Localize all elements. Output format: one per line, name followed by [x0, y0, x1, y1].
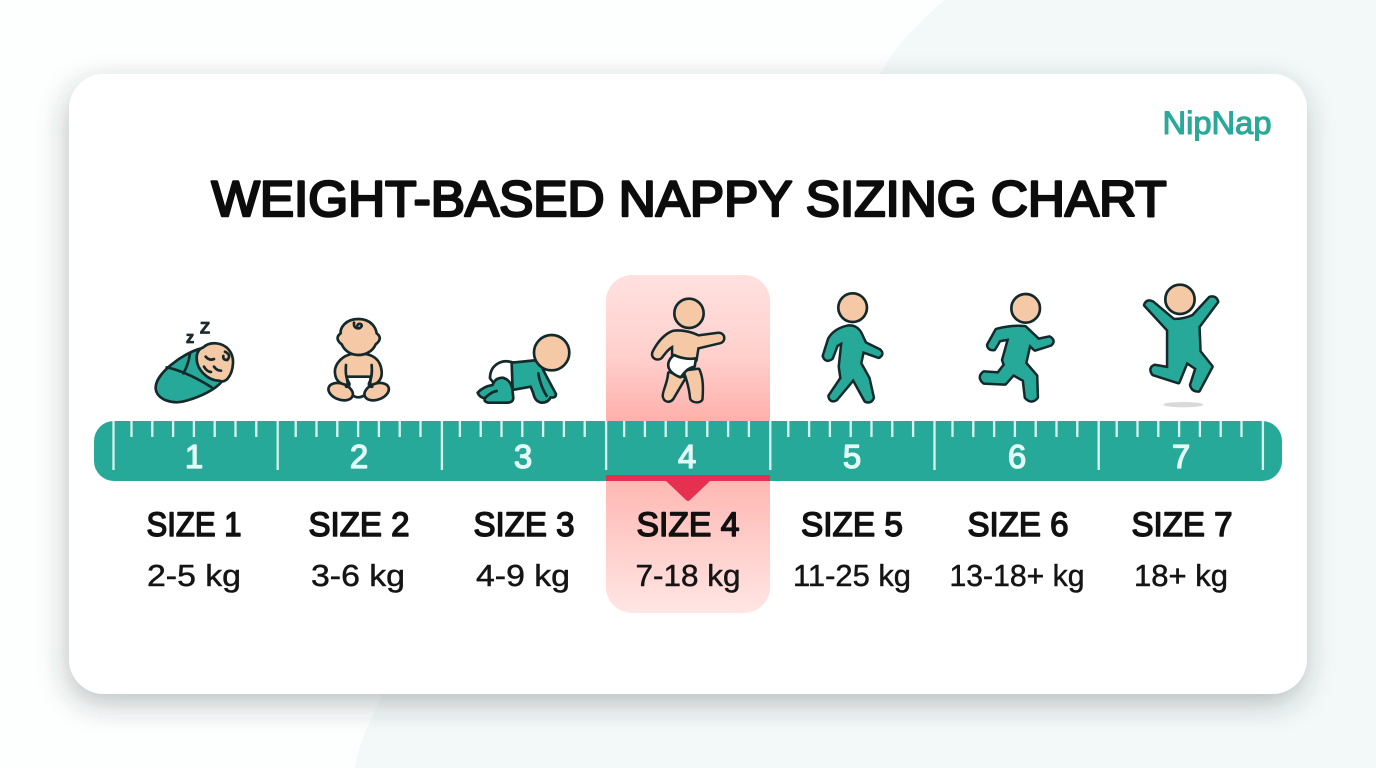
highlight panel: size 4 — [606, 275, 770, 613]
label: size 3: SIZE 3 — [474, 506, 574, 544]
panel: main card — [69, 74, 1307, 694]
label: size 5 — [793, 506, 911, 593]
label: size 7: SIZE 7 — [1132, 506, 1232, 544]
ruler numbers: 2 — [350, 438, 368, 475]
label: size 2 — [308, 506, 410, 593]
label: size 1: SIZE 1 — [146, 506, 242, 544]
label: size 7: 18+ kg — [1134, 558, 1228, 593]
icon: crawling baby — [478, 335, 569, 403]
sleep letters: Z — [200, 319, 210, 338]
label: size 6: SIZE 6 — [968, 506, 1068, 544]
size 4 marker — [606, 475, 770, 501]
label: size 5: 11-25 kg — [793, 558, 911, 593]
icon: jumping child — [1145, 285, 1217, 407]
label: size 5: SIZE 5 — [801, 506, 903, 544]
logo: NipNap: NipNap — [1162, 105, 1272, 141]
icon: swaddled sleeping baby — [156, 319, 233, 402]
label: size 2: SIZE 2 — [308, 506, 410, 544]
icon: walking child — [824, 293, 881, 401]
ruler ticks — [114, 421, 1263, 470]
label: size 1 — [146, 506, 242, 593]
label: size 4: SIZE 4 — [636, 506, 740, 544]
ruler numbers: 5 — [843, 438, 861, 475]
label: size 4 — [636, 506, 740, 593]
ruler numbers: 7 — [1172, 438, 1190, 475]
sleep letters — [186, 319, 210, 347]
label: size 2: 3-6 kg — [311, 558, 405, 593]
background tint shape — [355, 0, 1376, 768]
ruler numbers: 6 — [1008, 438, 1026, 475]
title: WEIGHT-BASED NAPPY SIZING CHART — [212, 171, 1166, 227]
label: size 4: 7-18 kg — [636, 558, 740, 593]
icon: sitting baby — [326, 319, 391, 404]
ruler numbers — [185, 438, 1190, 475]
sleep letters: z — [186, 328, 194, 347]
ruler numbers: 4 — [678, 438, 696, 475]
ruler — [94, 421, 1282, 481]
label: size 3 — [474, 506, 574, 593]
label: size 3: 4-9 kg — [476, 558, 570, 593]
ruler numbers: 3 — [514, 438, 532, 475]
ruler numbers: 1 — [185, 438, 203, 475]
label: size 7 — [1132, 506, 1232, 593]
icon: toddler in nappy — [653, 299, 723, 401]
label: size 6: 13-18+ kg — [950, 558, 1084, 593]
icon: running child — [981, 294, 1052, 400]
label: size 6 — [950, 506, 1084, 593]
label: size 1: 2-5 kg — [147, 558, 241, 593]
